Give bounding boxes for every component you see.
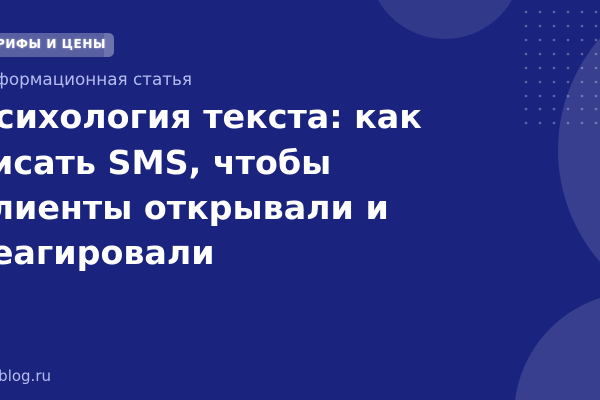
bottom right circle	[514, 292, 600, 400]
top circle	[368, 0, 522, 39]
badge	[0, 33, 114, 57]
title	[0, 97, 422, 272]
badge end cap	[104, 33, 114, 57]
right circle	[558, 0, 600, 320]
dot grid	[525, 11, 597, 124]
